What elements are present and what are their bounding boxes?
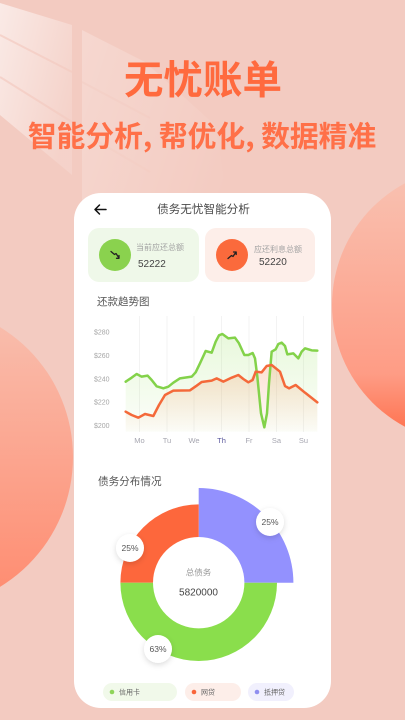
segment: orange 25%	[120, 504, 199, 583]
donut center: 5820000	[179, 588, 218, 598]
segment: purple 25%	[199, 488, 293, 583]
value: current repayment: 52222	[138, 259, 166, 270]
legend: credit card: 信用卡	[119, 688, 140, 696]
badge 25% purple: 25%	[261, 517, 279, 527]
y axis labels: $220	[94, 400, 110, 406]
orange area	[126, 365, 317, 432]
decorative circle left	[0, 305, 73, 609]
y axis labels	[94, 330, 110, 430]
legend: mortgage: 抵押贷	[264, 688, 285, 696]
x axis labels: Sa	[272, 436, 282, 445]
x axis labels: Fr	[245, 436, 253, 445]
back arrow	[95, 205, 106, 214]
badge 63% green: 63%	[149, 644, 167, 654]
legend: online loan	[185, 683, 241, 701]
label: interest: 应还利息总额	[254, 244, 302, 254]
x axis labels: Su	[299, 436, 308, 445]
phone card	[74, 193, 331, 708]
x axis labels: Tu	[163, 436, 171, 445]
heading: debt distribution: 债务分布情况	[98, 475, 162, 488]
legend: mortgage	[248, 683, 294, 701]
donut center	[153, 537, 244, 628]
donut chart	[116, 488, 293, 663]
legend: online loan: 网贷	[201, 688, 215, 696]
badge 25% orange: 25%	[121, 543, 139, 553]
x axis labels: Th	[217, 436, 226, 445]
title: 无忧账单	[124, 49, 282, 106]
badge 63% green	[144, 635, 172, 663]
y axis labels: $200	[94, 423, 110, 430]
icon: trending down	[99, 239, 131, 271]
heading: repayment trend: 还款趋势图	[97, 295, 150, 308]
segment: green 63%	[120, 583, 277, 661]
decorative circle right	[332, 167, 405, 443]
panel: interest total	[205, 228, 315, 282]
y axis labels: $240	[94, 376, 110, 384]
badge 25% purple	[256, 508, 284, 536]
icon: trending up	[216, 239, 248, 271]
legend: credit card	[103, 683, 177, 701]
green area	[126, 334, 317, 432]
x axis labels	[134, 436, 308, 445]
legend	[103, 683, 294, 701]
line chart	[94, 316, 317, 445]
orange line	[126, 365, 317, 418]
panel: current repayment total	[88, 228, 199, 282]
donut center: 总债务	[186, 568, 212, 578]
badge 25% orange	[116, 534, 144, 562]
window light reflection	[0, 3, 240, 270]
label: current repayment: 当前应还总额	[136, 242, 184, 252]
x axis labels: Mo	[134, 436, 145, 445]
y axis labels: $280	[94, 330, 110, 336]
x axis labels: We	[188, 436, 200, 445]
screen heading: 债务无忧智能分析	[157, 202, 250, 216]
y axis labels: $260	[94, 353, 110, 360]
green line	[126, 334, 317, 427]
value: interest: 52220	[259, 257, 287, 268]
subtitle: 智能分析, 帮优化, 数据精准	[28, 114, 376, 156]
